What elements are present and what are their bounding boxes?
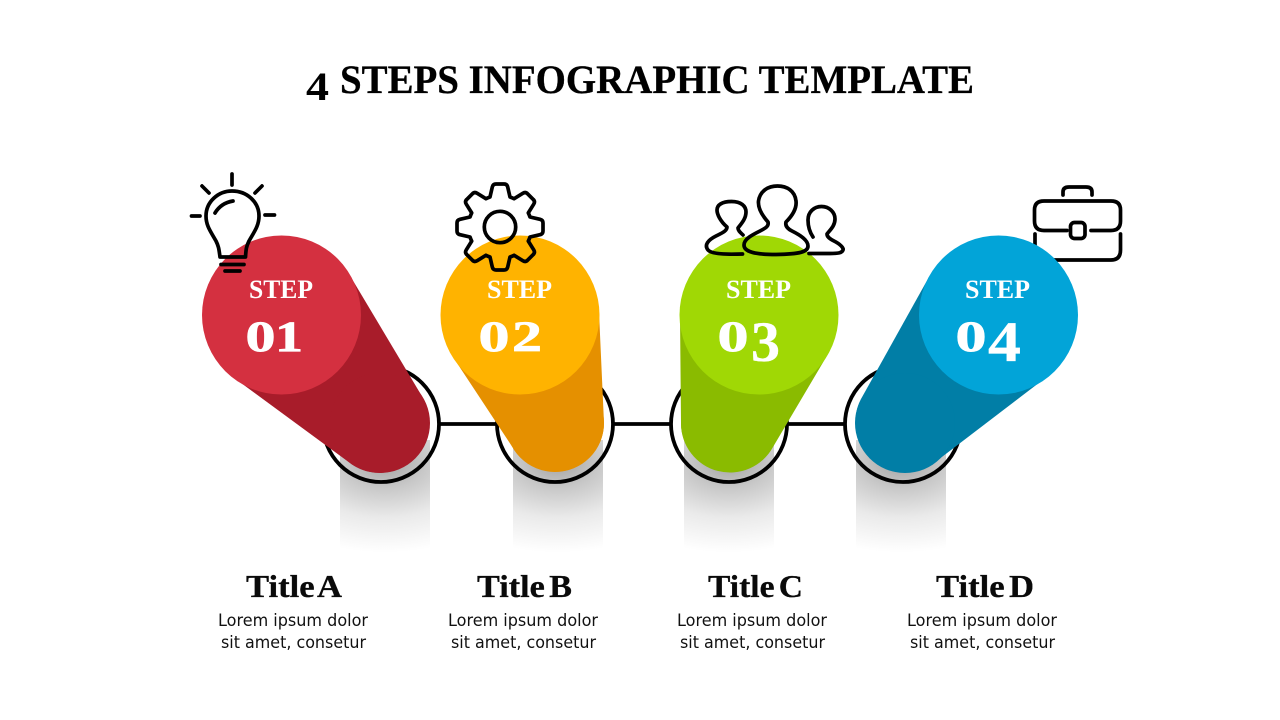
shadows under cylinders — [340, 440, 946, 555]
step 4 label: STEP — [965, 275, 1030, 304]
text block: title A — [218, 568, 368, 652]
title: STEPS INFOGRAPHIC TEMPLATE — [340, 57, 974, 102]
step 2 label: STEP — [487, 275, 552, 304]
step 2 label — [478, 275, 552, 361]
text block: title A: Lorem ipsum dolor — [218, 611, 368, 630]
step 2 label: 2 — [512, 314, 542, 361]
step 3 label — [718, 275, 791, 374]
step 4 label: 0 — [956, 314, 986, 361]
step 1 cylinder — [202, 236, 430, 473]
step 3 label: STEP — [726, 275, 791, 304]
step 4 label: 4 — [988, 311, 1021, 374]
text block: title A: Title A — [246, 568, 342, 604]
text block: title B — [448, 568, 598, 652]
text block: title C: Title C — [708, 568, 803, 604]
step 3 label: 0 — [718, 314, 748, 361]
timeline rings and connectors — [323, 366, 961, 482]
text block: title C: Lorem ipsum dolor — [677, 611, 827, 630]
text block: title B: sit amet, consetur — [451, 633, 596, 652]
step 1 label: 0 — [246, 314, 276, 361]
step 3 label: 3 — [751, 311, 780, 374]
text block: title C — [677, 568, 827, 652]
step 1 label — [246, 275, 313, 361]
icon: briefcase — [1034, 187, 1120, 260]
step 1 label: STEP — [249, 275, 313, 304]
text block: title D: sit amet, consetur — [910, 633, 1055, 652]
text block: title D — [907, 568, 1057, 652]
text block: title B: Title B — [477, 568, 572, 604]
text block: title A: sit amet, consetur — [221, 633, 366, 652]
step 1 label: 1 — [275, 314, 303, 361]
step 2 label: 0 — [478, 314, 510, 361]
step 4 label — [956, 275, 1030, 374]
step 4 cylinder — [855, 236, 1078, 473]
icon: light bulb — [192, 174, 274, 271]
step 3 cylinder — [680, 236, 838, 473]
title: 4 — [306, 64, 329, 109]
icon: gear — [457, 184, 543, 270]
step 2 cylinder — [440, 236, 604, 472]
icon: people — [706, 186, 843, 254]
text block: title D: Title D — [936, 568, 1034, 604]
text block: title B: Lorem ipsum dolor — [448, 611, 598, 630]
text block: title D: Lorem ipsum dolor — [907, 611, 1057, 630]
text block: title C: sit amet, consetur — [680, 633, 825, 652]
